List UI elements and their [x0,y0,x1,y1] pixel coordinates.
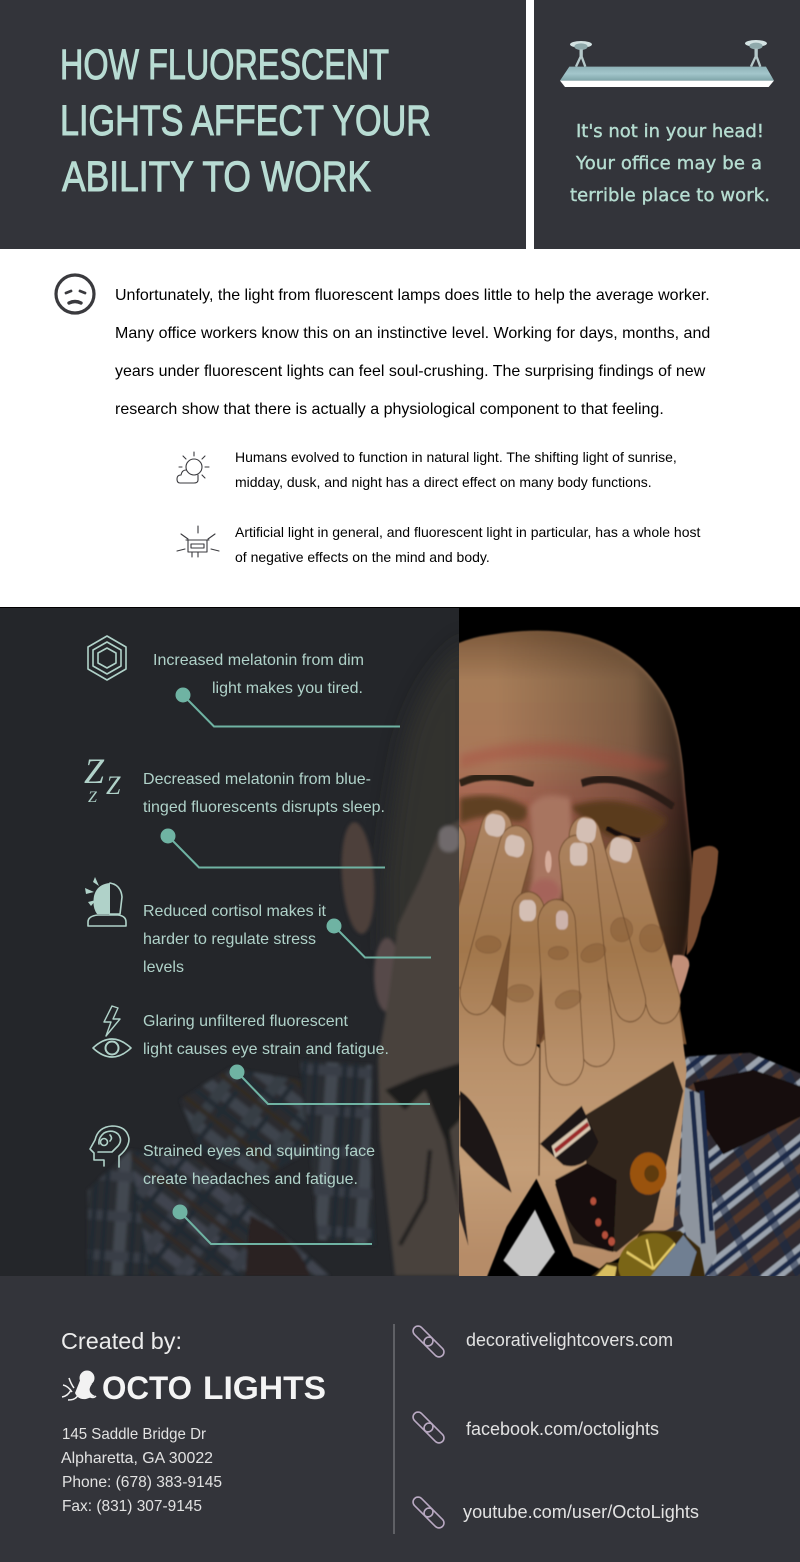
title: LIGHTS AFFECT YOUR [60,97,431,145]
icon: fluorescent ceiling lamp [560,40,774,87]
natural light text: midday, dusk, and night has a direct effect on many body functions. [235,474,652,490]
eye sockets [460,795,527,824]
contact address: 145 Saddle Bridge Dr [62,1426,207,1443]
icon: head profile [90,1126,129,1167]
effect 3: cortisol [85,877,431,976]
effect text: Increased melatonin from dim [153,652,364,669]
natural light text [235,449,677,490]
title: HOW FLUORESCENT [60,41,389,89]
intro paragraph: Unfortunately, the light from fluorescent lamps does little to help the average worker. [115,287,710,304]
tagline: It's not in your head! [576,121,764,142]
icon: chain link [411,1410,446,1445]
icon: hexagons [88,636,126,680]
effect text: create headaches and fatigue. [143,1171,358,1188]
contact address: Phone: (678) 383-9145 [62,1474,222,1491]
ear [687,846,718,955]
title [60,41,431,201]
icon: chain link [411,1495,446,1530]
effect 4: eye strain [93,1006,430,1104]
logo: Octo Lights: OCTO [102,1370,192,1406]
effect text: Decreased melatonin from blue- [143,771,371,788]
icon: sleep letters: Z [84,751,105,791]
tagline: Your office may be a [575,153,762,174]
connector [172,1204,372,1244]
nose [530,795,573,908]
artificial light text [235,524,700,565]
title: ABILITY TO WORK [62,153,371,201]
shirt on the right [503,1053,800,1286]
effect text: light makes you tired. [212,680,363,697]
natural light text: Humans evolved to function in natural light. The shifting light of sunrise, [235,449,677,465]
icon: sleep letters: Z [88,789,98,806]
intro paragraph: years under fluorescent lights can feel soul-crushing. The surprising findings of new [115,363,706,380]
contact address: Alpharetta, GA 30022 [61,1450,213,1467]
effect text [143,1013,389,1058]
fingers, left hand [423,843,448,1002]
panel: photo of man covering his face with effects list [0,607,800,1296]
connector [326,918,431,958]
link: website [411,1324,673,1359]
palms [400,959,540,1286]
effect 2: sleep [84,751,385,868]
icon: lightning and eye [93,1006,131,1057]
link: youtube: youtube.com/user/OctoLights [463,1502,699,1522]
icon: fluorescent fixture [177,526,219,557]
logo: Octo Lights: LIGHTS [203,1370,326,1406]
intro paragraph [115,287,710,418]
created by label: Created by: [61,1328,182,1354]
panel: title header [0,0,526,249]
watch [590,1230,706,1276]
intro paragraph: Many office workers know this on an instinctive level. Working for days, months, and [115,325,710,342]
effect 1: tiredness [88,636,400,726]
contact address: Fax: (831) 307-9145 [62,1498,202,1515]
knuckle creases [476,918,664,1012]
effect text: levels [143,959,184,976]
hands [459,809,688,1276]
effect text: harder to regulate stress [143,931,316,948]
left text panel tint [0,608,459,1276]
link: facebook: facebook.com/octolights [466,1419,659,1439]
effects list [84,636,431,1244]
connector [160,828,385,868]
icon: sun and cloud [177,452,209,483]
effect text [153,652,364,697]
photo: man covering his face [459,630,800,1276]
effect text: Reduced cortisol makes it [143,903,327,920]
tagline: terrible place to work. [570,185,770,206]
artificial light text: of negative effects on the mind and body. [235,549,490,565]
icon: chain link [411,1324,446,1359]
effect text: tinged fluorescents disrupts sleep. [143,799,385,816]
effect 5: headaches [90,1126,375,1244]
effect text: Glaring unfiltered fluorescent [143,1013,349,1030]
nails [484,812,634,930]
tagline [570,121,770,206]
logo: Octo Lights [62,1370,326,1406]
panel: footer [0,1276,800,1562]
ghosted photo under text panel [88,640,470,1276]
tattoos on hands [460,1091,512,1193]
effect text [143,771,385,816]
effect text: Strained eyes and squinting face [143,1143,375,1160]
shadow between fingers [459,890,688,1046]
panel: introduction [56,275,710,565]
ghost shirt [180,1068,310,1180]
intro paragraph: research show that there is actually a physiological component to that feeling. [115,401,664,418]
icon: sad face [56,275,94,313]
panel: lamp and tagline [534,0,800,249]
brows [460,776,533,785]
icon: sleep letters [84,751,121,806]
fingers, right hand [622,858,663,1002]
artificial light text: Artificial light in general, and fluorescent light in particular, has a whole host [235,524,700,540]
effect text [143,903,327,976]
head [459,630,719,1045]
effect text [143,1143,375,1188]
icon: head with stress [85,877,126,926]
divider [393,1324,395,1534]
contact address [61,1426,222,1515]
effect text: light causes eye strain and fatigue. [143,1041,389,1058]
link: facebook [411,1410,659,1445]
icon: sleep letters: Z [106,771,121,800]
connector [176,688,400,726]
connector [230,1064,430,1104]
link: youtube [411,1495,699,1530]
link: website: decorativelightcovers.com [466,1330,673,1350]
